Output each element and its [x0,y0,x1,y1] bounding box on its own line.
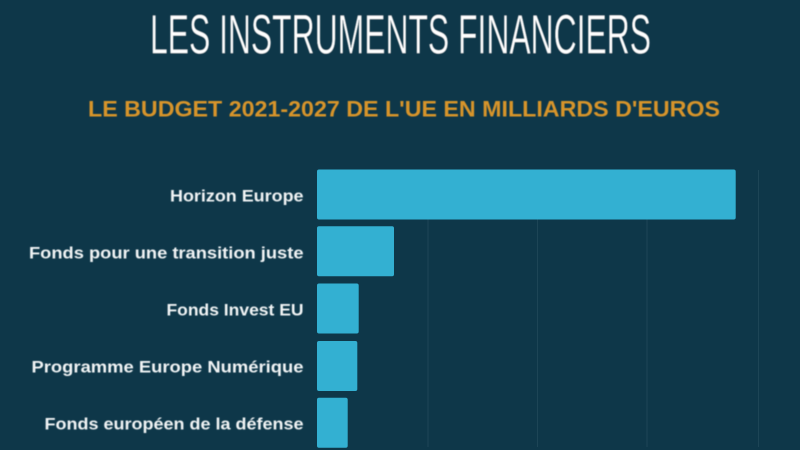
row: Horizon Europe [170,170,736,220]
row: Fonds Invest EU: Fonds Invest EU [166,300,304,320]
row: Fonds européen de la défense [44,398,348,448]
row: Fonds Invest EU [166,284,359,334]
row: Programme Europe Numérique: Programme Europe Numérique [32,358,304,376]
row: Fonds européen de la défense: Fonds européen de la défense [44,414,304,434]
row: Fonds pour une transition juste: Fonds pour une transition juste [29,244,304,262]
row: Programme Europe Numérique [32,341,357,391]
row: Horizon Europe: Horizon Europe [170,186,304,206]
row: Fonds pour une transition juste [29,226,394,276]
subtitle: LE BUDGET 2021-2027 DE L'UE EN MILLIARDS D'EUROS [88,96,720,122]
bar chart [29,170,758,448]
